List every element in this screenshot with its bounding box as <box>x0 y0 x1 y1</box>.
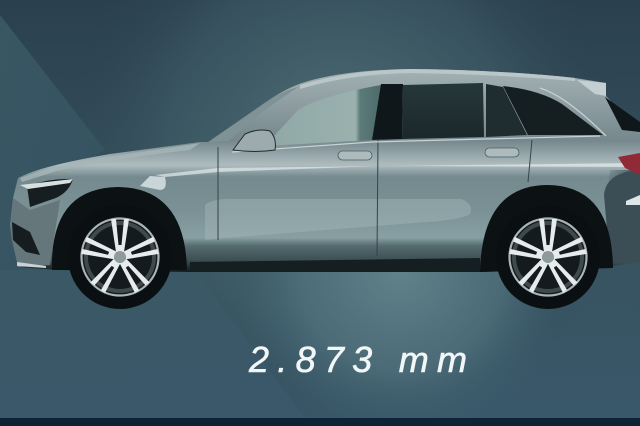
roof rail <box>300 69 575 89</box>
front grille <box>12 222 40 255</box>
rear wheel <box>496 205 600 309</box>
quarter window trim <box>540 88 606 136</box>
lower front lip <box>17 262 46 268</box>
rocker shadow <box>190 258 480 272</box>
door seams <box>218 140 532 256</box>
bottom band <box>0 418 640 426</box>
mirror <box>233 130 275 152</box>
rear wheel arch <box>480 185 613 272</box>
lower left diagonal panel <box>0 270 305 418</box>
rear quarter window <box>503 86 603 135</box>
rear quarter shading <box>600 170 640 268</box>
front wheel arch <box>52 187 187 270</box>
measurement label: 2.873 mm <box>248 339 467 380</box>
hood highlight <box>20 143 200 182</box>
spoiler <box>577 80 606 96</box>
door panel reflection <box>205 199 471 240</box>
headlight <box>27 179 73 207</box>
car body <box>10 69 640 272</box>
front window <box>265 85 381 146</box>
windshield strip <box>209 87 298 142</box>
shoulder crease <box>155 163 640 177</box>
fender highlight <box>140 176 166 190</box>
middle window <box>402 83 484 139</box>
door handle front <box>338 151 372 160</box>
B pillar <box>372 84 403 140</box>
front wheel <box>68 205 172 309</box>
door handle rear <box>485 148 519 157</box>
belt line <box>232 136 600 152</box>
car <box>10 69 640 309</box>
rear bumper highlight <box>626 195 640 205</box>
tail light <box>618 153 640 175</box>
rear screen <box>605 97 640 132</box>
rear door window <box>486 84 527 137</box>
left diagonal panel <box>0 15 105 420</box>
front bumper shading <box>10 198 60 267</box>
